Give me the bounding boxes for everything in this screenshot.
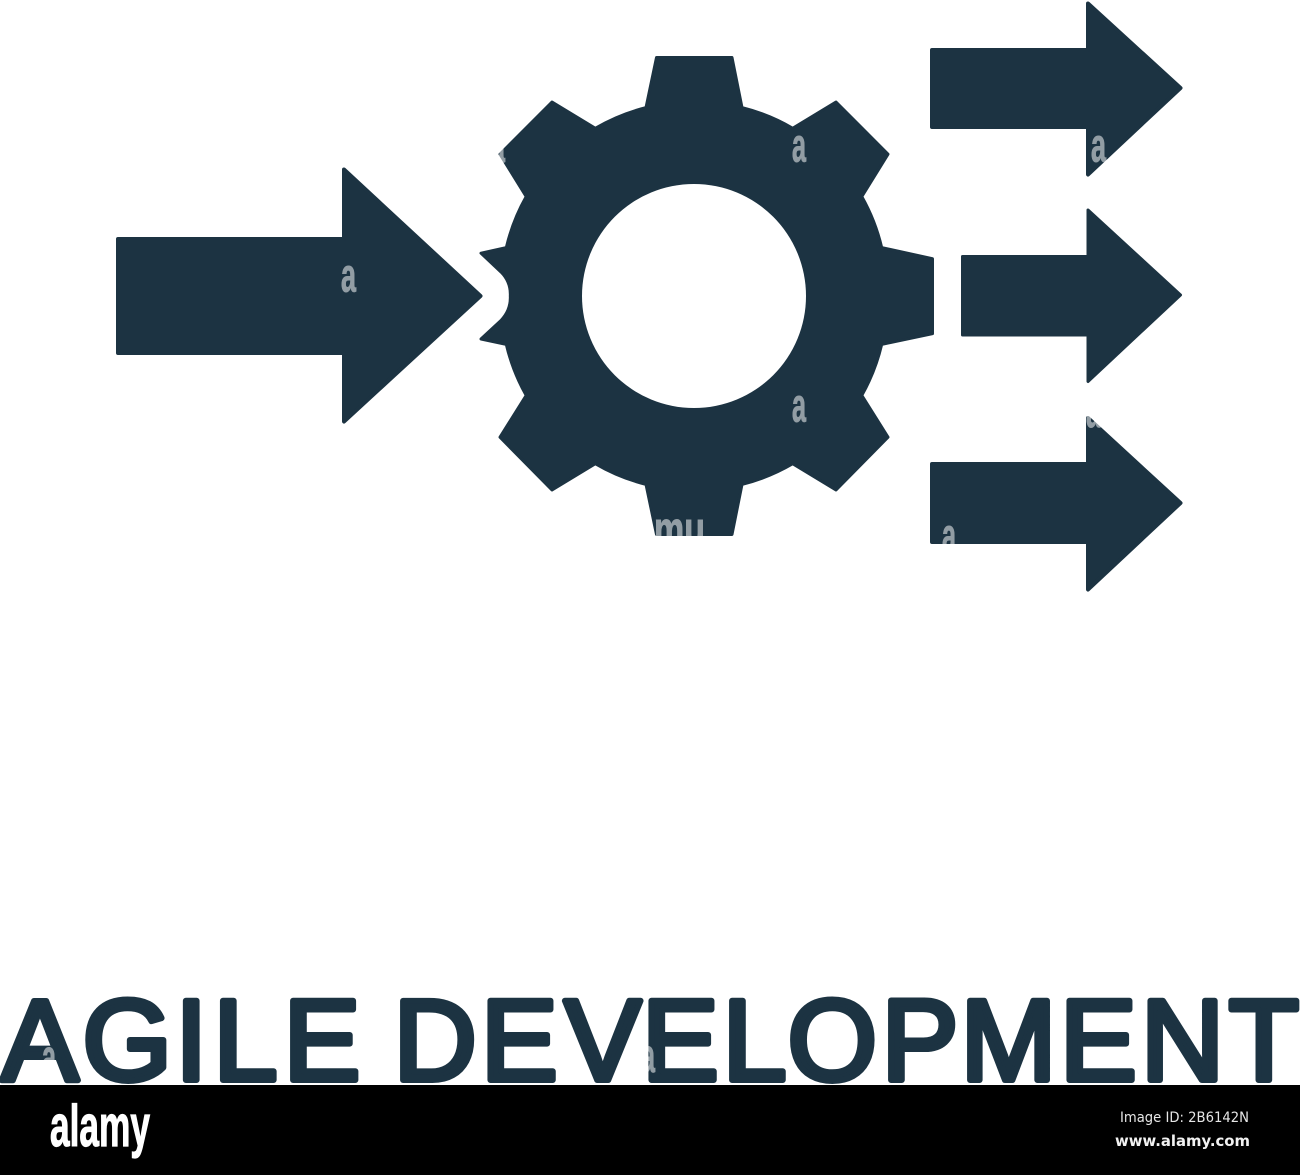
- icon: output arrow middle: [962, 210, 1180, 382]
- watermark glyphs: a: [1091, 118, 1106, 172]
- website url: www.alamy.com: [1115, 1132, 1250, 1150]
- watermark glyphs: a: [641, 1029, 655, 1082]
- icon: input arrow: [118, 170, 480, 422]
- title: AGILE DEVELOPMENT: [2, 977, 1299, 1105]
- watermark glyphs: a: [792, 118, 806, 172]
- watermark glyphs: mu: [654, 502, 705, 555]
- watermark glyphs: a: [341, 248, 356, 302]
- watermark glyphs: a: [792, 378, 806, 432]
- gear centre hole: [582, 184, 806, 408]
- watermark glyphs: a: [42, 1030, 56, 1083]
- footer band: [0, 1085, 1300, 1175]
- icon: output arrow top: [932, 4, 1180, 174]
- icon: output arrow bottom: [932, 418, 1180, 590]
- image id: Image ID: 2B6142N: [1120, 1110, 1249, 1126]
- watermark glyphs: a: [491, 119, 505, 172]
- watermark glyphs: [42, 118, 1106, 1083]
- watermark glyphs: a: [942, 508, 956, 562]
- icon: gear: [481, 58, 932, 534]
- watermark glyphs: a: [1086, 384, 1101, 437]
- alamy logo: alamy: [50, 1094, 150, 1159]
